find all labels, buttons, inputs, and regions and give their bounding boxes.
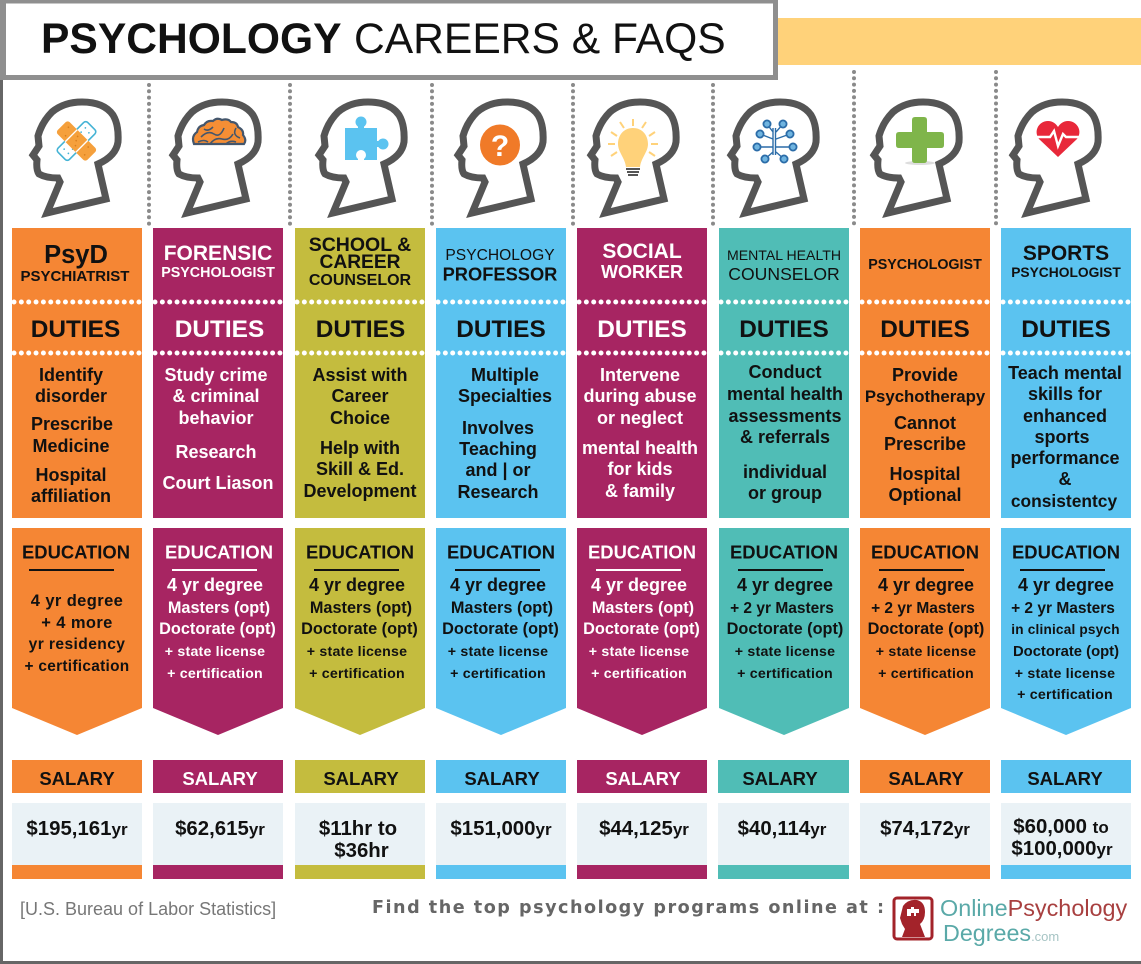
education: + state license (589, 644, 689, 660)
career title: PROFESSOR (443, 264, 557, 284)
education: + state license (876, 644, 976, 660)
logo: OnlinePsychologyDegrees.com (894, 895, 1128, 946)
duties: Optional (888, 485, 962, 505)
career title (295, 228, 425, 518)
career title: COUNSELOR (728, 264, 840, 284)
duties (865, 316, 986, 505)
education: EDUCATION (1012, 542, 1120, 562)
education (1001, 528, 1131, 735)
education (12, 528, 142, 735)
duties (456, 316, 552, 502)
career title: PSYCHOLOGY (445, 247, 555, 264)
education: 4 yr degree (591, 575, 687, 595)
logo: OnlinePsychologyDegrees.com: OnlinePsychology (940, 895, 1128, 921)
salary: $40,114yr (738, 818, 827, 840)
duties: DUTIES (31, 316, 120, 343)
education: EDUCATION (588, 542, 696, 562)
duties: Teaching (459, 439, 537, 459)
salary (295, 760, 425, 879)
duties: DUTIES (1021, 316, 1111, 343)
education: EDUCATION (871, 542, 979, 562)
duties: Multiple (471, 365, 539, 385)
duties: Psychotherapy (865, 387, 986, 406)
duties: or neglect (597, 408, 683, 428)
education: + certification (878, 666, 974, 682)
column: sports psychologist (1001, 102, 1131, 879)
duties: Teach mental (1008, 363, 1122, 383)
duties: Development (303, 481, 417, 501)
duties: or group (748, 483, 822, 503)
education: + state license (448, 644, 548, 660)
career title: WORKER (601, 262, 683, 282)
duties: for kids (607, 459, 673, 479)
education: + state license (1015, 666, 1115, 682)
salary: $62,615yr (175, 818, 265, 840)
yellow title band (778, 18, 1141, 65)
education: Masters (opt) (451, 599, 553, 617)
education: + certification (450, 666, 546, 682)
duties: skills for (1028, 384, 1102, 404)
education: yr residency (29, 636, 125, 653)
career title: COUNSELOR (309, 272, 412, 289)
duties: Hospital (889, 464, 961, 484)
duties: performance (1010, 448, 1120, 468)
duties: Specialties (458, 386, 552, 406)
career title: SPORTS (1023, 242, 1109, 265)
salary (12, 760, 142, 879)
education: EDUCATION (22, 542, 130, 562)
duties (31, 316, 120, 506)
column: forensic psychologist (153, 102, 283, 879)
duties: Court Liason (162, 473, 274, 493)
duties: Study crime (164, 365, 268, 385)
career title (12, 228, 142, 518)
column: school and career counselor (295, 102, 425, 879)
salary: $11hr to (319, 818, 397, 840)
duties: mental health (727, 384, 843, 404)
career title: SCHOOL & (309, 234, 411, 256)
duties (162, 316, 274, 493)
career title (860, 228, 990, 518)
duties: Intervene (600, 365, 680, 385)
source note: [U.S. Bureau of Labor Statistics] (20, 899, 276, 919)
education: + state license (735, 644, 835, 660)
duties: Provide (892, 365, 958, 385)
duties: Involves (462, 418, 534, 438)
education: + certification (167, 666, 263, 682)
title (0, 0, 776, 80)
education: + certification (309, 666, 405, 682)
education: EDUCATION (447, 542, 555, 562)
salary (153, 760, 283, 879)
career title (719, 228, 849, 518)
duties: DUTIES (316, 316, 405, 343)
education: Doctorate (opt) (583, 620, 700, 638)
education: + 2 yr Masters (1011, 600, 1115, 617)
salary: SALARY (323, 768, 399, 789)
duties: DUTIES (175, 316, 264, 343)
duties: affiliation (31, 486, 111, 506)
duties: DUTIES (456, 316, 546, 343)
duties: sports (1034, 427, 1090, 447)
duties: Help with (320, 438, 400, 458)
education: + certification (1017, 687, 1113, 703)
column: social worker (577, 102, 707, 879)
duties: DUTIES (597, 316, 687, 343)
education: EDUCATION (306, 542, 414, 562)
duties: and | or (465, 460, 531, 480)
career title (1001, 228, 1131, 518)
career title: PSYCHIATRIST (21, 268, 129, 285)
footer call to action: Find the top psychology programs online at : (372, 898, 884, 918)
duties: Hospital (35, 465, 107, 485)
salary: $36hr (334, 840, 389, 862)
salary: $151,000yr (450, 818, 552, 840)
column: psychology professor (436, 102, 566, 879)
duties: & family (605, 481, 675, 501)
career title (436, 228, 566, 518)
duties (727, 316, 843, 503)
duties: DUTIES (880, 316, 970, 343)
education (719, 528, 849, 735)
education: Doctorate (opt) (442, 620, 559, 638)
education (295, 528, 425, 735)
head icon: question mark: ? (491, 130, 509, 163)
duties: consistentcy (1011, 491, 1117, 511)
duties: enhanced (1023, 406, 1107, 426)
career title: FORENSIC (164, 242, 272, 265)
head icon: neural network (731, 102, 816, 213)
salary (577, 760, 707, 879)
duties: Assist with (312, 365, 408, 385)
career title: MENTAL HEALTH (727, 247, 841, 263)
education: + certification (737, 666, 833, 682)
duties: Choice (330, 408, 390, 428)
education: + state license (307, 644, 407, 660)
duties: Prescribe (884, 434, 966, 454)
duties: individual (743, 462, 827, 482)
education: + state license (165, 644, 265, 660)
duties: Skill & Ed. (316, 459, 404, 479)
duties: during abuse (583, 386, 697, 406)
education: + 2 yr Masters (730, 600, 834, 617)
education: Masters (opt) (168, 599, 270, 617)
salary: SALARY (888, 768, 964, 789)
column: psychologist (860, 102, 990, 879)
salary (1001, 760, 1131, 879)
column: mental health counselor (718, 102, 849, 879)
title: PSYCHOLOGY (41, 15, 342, 63)
duties: Identify (39, 365, 103, 385)
salary: $44,125yr (599, 818, 689, 840)
career title: PSYCHOLOGIST (161, 265, 275, 281)
duties: Conduct (749, 362, 821, 382)
salary: SALARY (605, 768, 681, 789)
education: + certification (591, 666, 687, 682)
career title: PSYCHOLOGIST (1011, 265, 1121, 280)
education: 4 yr degree (737, 575, 833, 595)
education (577, 528, 707, 735)
salary: SALARY (1027, 768, 1103, 789)
duties: Prescribe (31, 414, 113, 434)
duties (303, 316, 417, 501)
head icon: light bulb (591, 102, 676, 213)
title: CAREERS & FAQS (354, 15, 726, 63)
salary: $195,161yr (26, 818, 128, 840)
head icon: question mark (458, 102, 543, 213)
duties: Research (175, 442, 257, 462)
career title: PSYCHOLOGIST (868, 257, 982, 273)
salary: SALARY (39, 768, 115, 789)
education (860, 528, 990, 735)
salary: $100,000yr (1011, 838, 1113, 860)
head icon: bandage (33, 102, 118, 213)
duties (582, 316, 698, 501)
duties: behavior (178, 408, 254, 428)
education: + certification (24, 658, 130, 675)
education: + 2 yr Masters (871, 600, 975, 617)
education: Doctorate (opt) (1013, 644, 1119, 660)
salary (718, 760, 849, 879)
salary: $74,172yr (880, 818, 970, 840)
career title: CAREER (319, 252, 401, 273)
salary: $60,000 to (1013, 816, 1109, 838)
education: 4 yr degree (167, 575, 263, 595)
career title: PsyD (44, 241, 108, 269)
education: Masters (opt) (592, 599, 694, 617)
education: Doctorate (opt) (159, 620, 276, 638)
duties: & referrals (740, 427, 830, 447)
column: PsyD psychiatrist (12, 102, 142, 879)
education: Doctorate (opt) (301, 620, 418, 638)
education (436, 528, 566, 735)
duties (1008, 316, 1122, 511)
career title (577, 228, 707, 518)
salary: SALARY (182, 768, 258, 789)
duties: & criminal (172, 386, 260, 406)
education (153, 528, 283, 735)
duties: disorder (35, 386, 107, 406)
logo: OnlinePsychologyDegrees.com: Degrees.com (943, 920, 1059, 946)
salary: SALARY (742, 768, 818, 789)
education: Doctorate (opt) (727, 620, 843, 638)
career title: SOCIAL (602, 240, 682, 263)
education: 4 yr degree (309, 575, 405, 595)
duties: mental health (582, 438, 698, 458)
education: 4 yr degree (1018, 575, 1114, 595)
duties: Medicine (32, 436, 110, 456)
education: 4 yr degree (450, 575, 546, 595)
duties: & (1058, 469, 1072, 489)
education: 4 yr degree (31, 592, 123, 610)
education: Doctorate (opt) (868, 620, 984, 638)
salary (860, 760, 990, 879)
duties: Cannot (894, 413, 956, 433)
duties: Career (331, 386, 389, 406)
education: + 4 more (41, 614, 113, 632)
career title (153, 228, 283, 518)
salary (436, 760, 566, 879)
education: in clinical psych (1011, 622, 1120, 637)
salary: SALARY (464, 768, 540, 789)
education: EDUCATION (730, 542, 838, 562)
head icon: green cross (874, 102, 959, 213)
duties: Research (457, 482, 539, 502)
duties: assessments (728, 406, 842, 426)
education: EDUCATION (165, 542, 273, 562)
head icon: heart with pulse (1013, 102, 1098, 213)
duties: DUTIES (739, 316, 829, 343)
education: 4 yr degree (878, 575, 974, 595)
education: Masters (opt) (310, 599, 412, 617)
head icon: puzzle piece (319, 102, 404, 213)
head icon: brain (173, 102, 258, 213)
